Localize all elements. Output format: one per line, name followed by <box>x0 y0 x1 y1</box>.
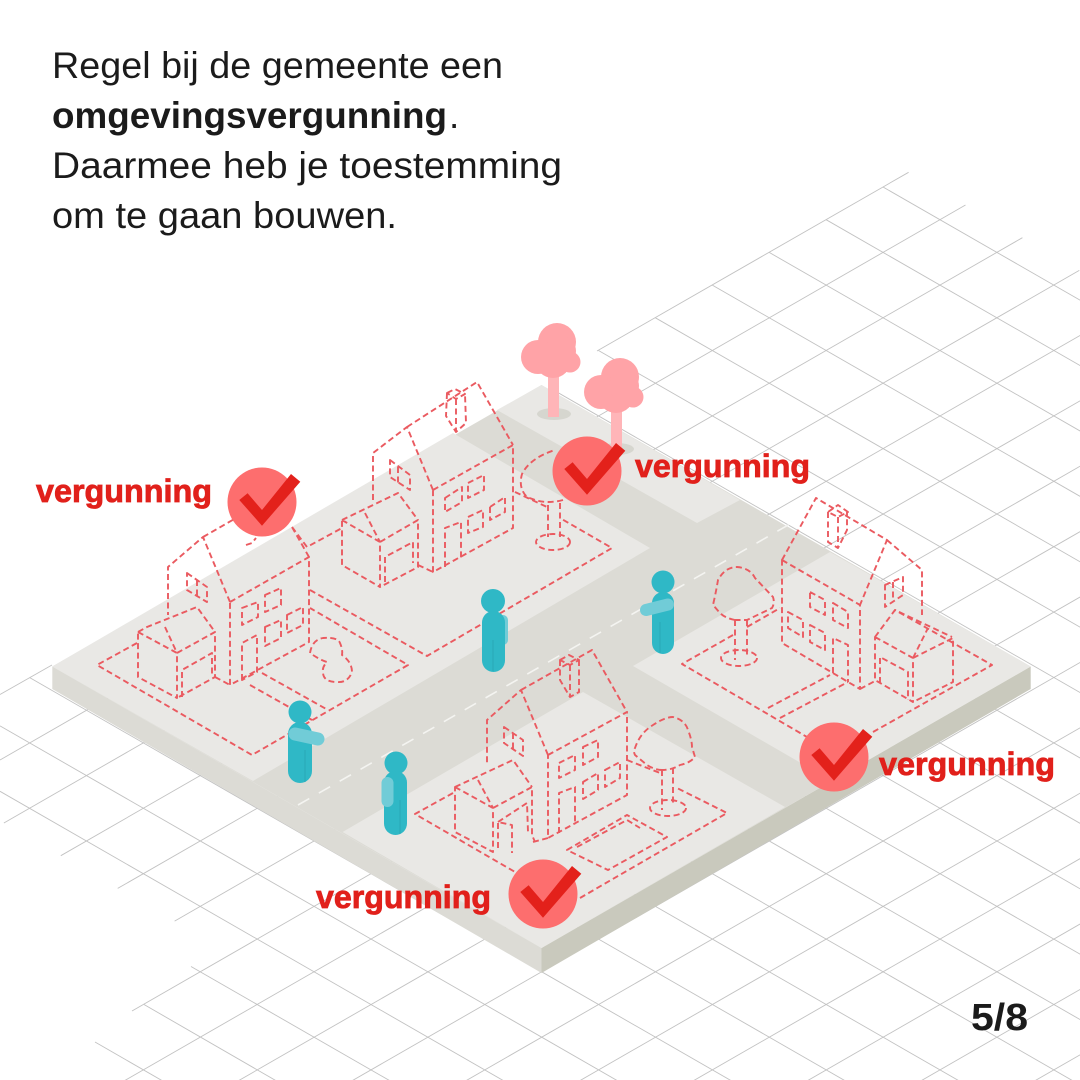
heading: . <box>449 95 459 136</box>
label: bottom vergunning: vergunning <box>316 879 491 915</box>
check badge: top <box>552 436 625 506</box>
person: centre <box>481 589 508 672</box>
plot: house left with annex, bush and driveway <box>97 510 408 755</box>
plot: house bottom with annex, tree and garden <box>415 650 727 898</box>
heading <box>52 45 562 236</box>
label: right vergunning: vergunning <box>879 746 1055 782</box>
heading: Regel bij de gemeente een <box>52 45 503 86</box>
label: top vergunning: vergunning <box>635 448 810 484</box>
plot: house right with annex and tree <box>682 498 992 737</box>
plot: house top with annex and tree <box>310 382 612 656</box>
heading: omgevingsvergunning <box>52 95 447 136</box>
heading: om te gaan bouwen. <box>52 195 397 236</box>
heading: Daarmee heb je toestemming <box>52 145 562 186</box>
isometric platform with roads and blocks <box>52 385 1031 973</box>
page number: 5/8 <box>971 997 1028 1039</box>
label: left vergunning: vergunning <box>36 473 212 509</box>
check badge: bottom <box>508 860 581 928</box>
person: left with arm forward <box>288 700 318 783</box>
tree: pink front tree <box>584 358 644 455</box>
person: bottom middle <box>382 752 408 835</box>
person: right with arm forward <box>646 570 674 654</box>
check badge: left <box>228 468 300 536</box>
tree: pink back tree <box>521 323 580 420</box>
check badge: right <box>800 722 872 792</box>
